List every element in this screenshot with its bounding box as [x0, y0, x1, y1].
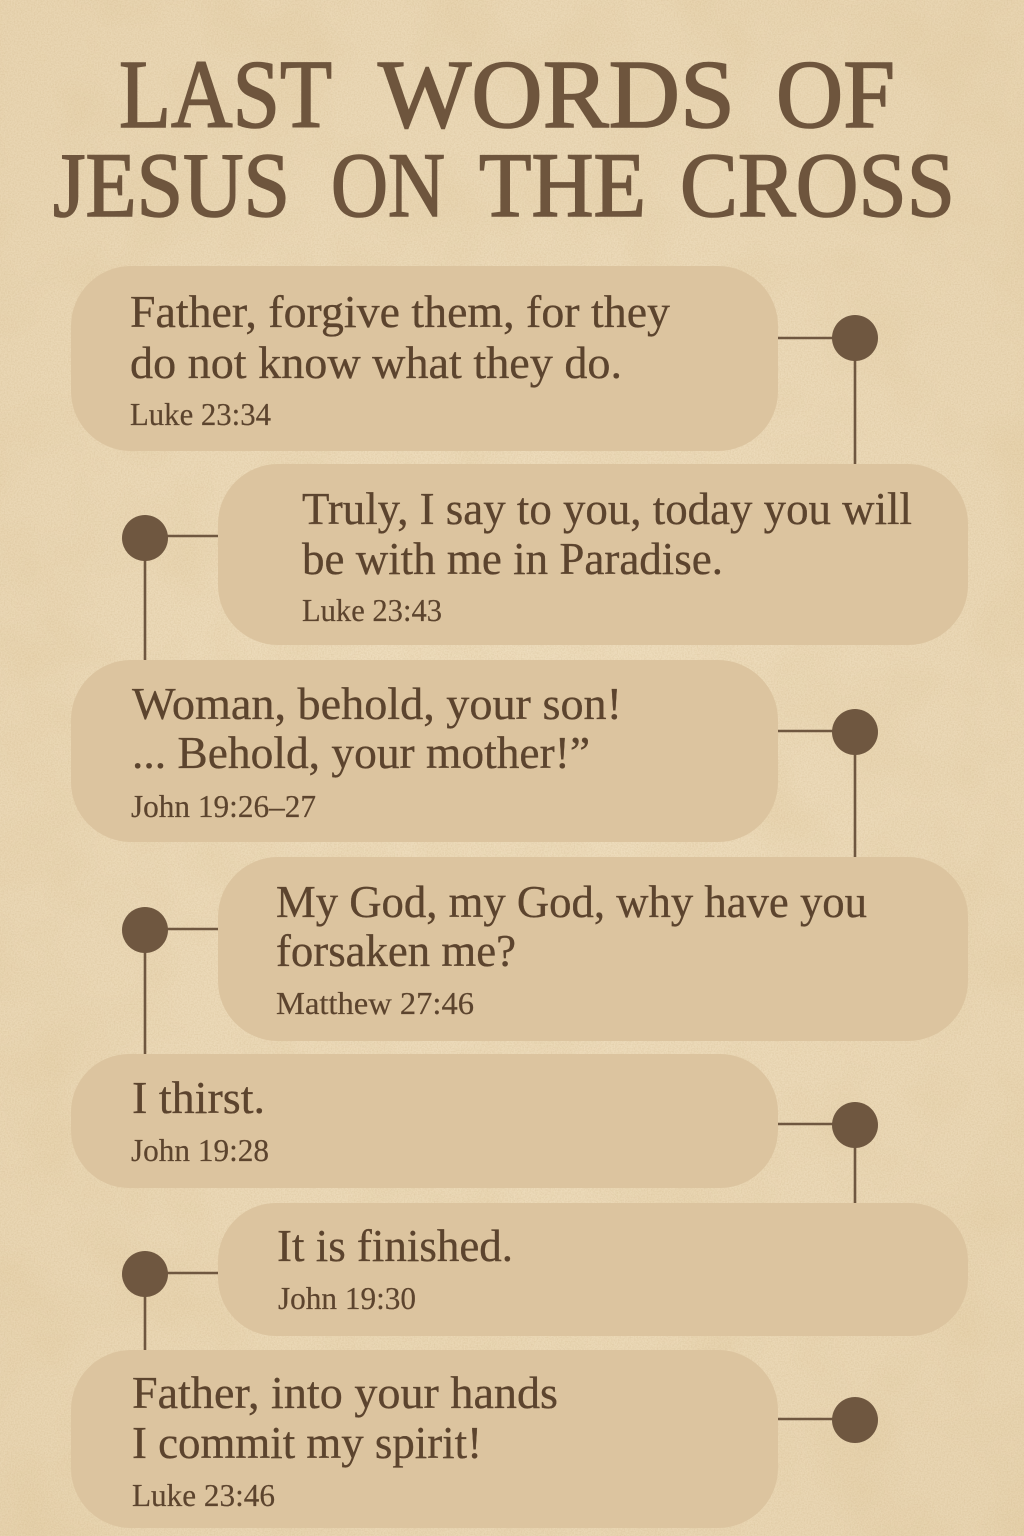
panel: word 4: Matthew 27:46: [276, 985, 474, 1021]
panel: word 2: Luke 23:43: [302, 592, 442, 628]
panel: word 3: Woman, behold, your son!: [132, 678, 622, 729]
title: THE: [479, 134, 646, 236]
timeline connector: word 7: [778, 1397, 878, 1443]
panel: word 7: Luke 23:46: [132, 1477, 275, 1513]
panel: word 7: [71, 1350, 778, 1528]
panel: word 2: Truly, I say to you, today you will: [302, 483, 912, 534]
panel: word 1: [71, 266, 778, 451]
title: WORDS: [378, 41, 735, 148]
panel: word 3: ... Behold, your mother!”: [132, 727, 590, 778]
timeline connector: word 5: [778, 1102, 878, 1205]
panel: word 3: [71, 660, 778, 842]
panel: word 1: Luke 23:34: [130, 396, 271, 432]
panel: word 6: It is finished.: [277, 1220, 513, 1271]
panel: word 5: I thirst.: [132, 1072, 265, 1123]
panel: word 4: My God, my God, why have you: [276, 876, 867, 927]
panel: word 6: John 19:30: [278, 1280, 416, 1316]
panel: word 3: John 19:26–27: [131, 788, 316, 824]
timeline connector: word 3: [778, 709, 878, 859]
panel: word 7: I commit my spirit!: [132, 1417, 482, 1468]
panel: word 7: Father, into your hands: [132, 1367, 558, 1418]
panel: word 1: do not know what they do.: [130, 337, 622, 388]
panel: word 6: [218, 1203, 968, 1336]
panel: word 2: [218, 464, 968, 645]
title: LAST: [119, 41, 332, 148]
panel: word 5: John 19:28: [131, 1132, 269, 1168]
panel: word 1: Father, forgive them, for they: [130, 286, 670, 337]
panel: word 5: [71, 1054, 778, 1188]
title: ON: [331, 134, 445, 236]
title: [53, 41, 955, 236]
panel: word 4: forsaken me?: [276, 925, 516, 976]
title: CROSS: [680, 134, 955, 236]
timeline connector: word 2: [122, 515, 218, 662]
timeline connector: word 4: [122, 907, 218, 1056]
timeline connector: word 6: [122, 1251, 218, 1352]
panel: word 2: be with me in Paradise.: [302, 533, 723, 584]
timeline connector: word 1: [778, 315, 878, 466]
title: JESUS: [53, 134, 290, 236]
title: OF: [776, 41, 895, 148]
panel: word 4: [218, 857, 968, 1041]
